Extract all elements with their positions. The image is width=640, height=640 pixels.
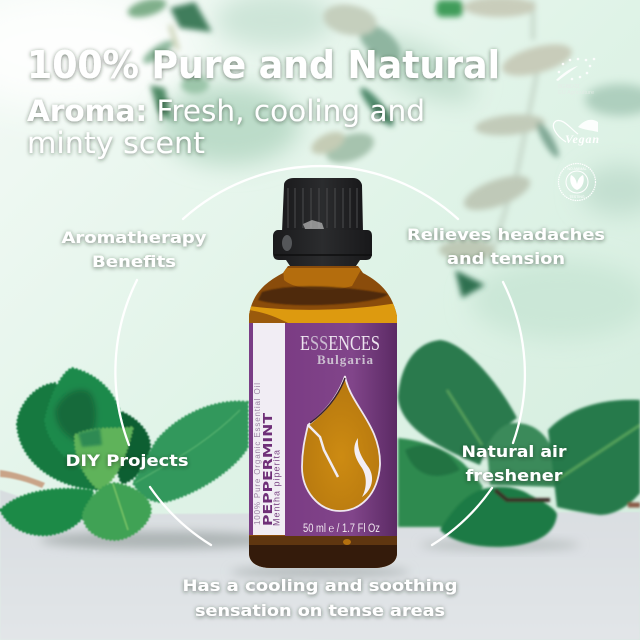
mint sprig right — [398, 340, 640, 547]
brand logo — [300, 331, 380, 367]
icon: EU organic leaf — [556, 58, 595, 96]
aroma description — [27, 94, 425, 160]
label: relieves headaches: Relieves headaches — [407, 225, 605, 244]
label: natural air freshener: freshener — [466, 466, 563, 485]
label: relieves headaches — [407, 225, 605, 268]
icon: EU organic leaf: EU Agriculture — [558, 90, 594, 96]
volume text: 50 ml ℮ / 1.7 Fl Oz — [303, 523, 380, 535]
label: aromatherapy benefits — [62, 228, 207, 271]
label: DIY projects: DIY Projects — [66, 451, 188, 470]
black cap — [282, 178, 363, 232]
side strip text: 100% Pure Organic Essential Oil — [253, 383, 262, 525]
label: cooling sensation — [182, 576, 458, 620]
peppermint bottle — [249, 178, 397, 568]
mint sprig left — [0, 368, 248, 540]
label: aromatherapy benefits: Benefits — [92, 252, 176, 271]
label: relieves headaches: and tension — [447, 249, 565, 268]
brand logo: Bulgaria — [317, 352, 374, 367]
blurred eucalyptus leaves — [126, 0, 575, 298]
aroma description: minty scent — [27, 126, 205, 160]
white circle arcs — [115, 166, 525, 545]
white side strip — [253, 323, 285, 535]
icon: EU organic leaf: BG-BIO-21 — [558, 84, 580, 90]
side strip text: PEPPERMINT — [261, 412, 275, 526]
side strip text: Mentha piperita — [272, 450, 282, 526]
icon: no animal testing: NO ANIMAL — [567, 167, 587, 171]
label: natural air freshener — [462, 442, 567, 485]
label: cooling sensation: sensation on tense areas — [195, 601, 445, 620]
title: 100% Pure and Natural — [27, 43, 500, 87]
certification icons — [553, 58, 599, 201]
amber drop emblem — [302, 376, 380, 511]
icon: vegan: Vegan — [565, 132, 599, 146]
icon: no animal testing — [558, 164, 596, 200]
aroma description: Aroma: Fresh, cooling and — [27, 94, 425, 128]
purple label — [285, 323, 397, 536]
label: aromatherapy benefits: Aromatherapy — [62, 228, 207, 247]
icon: no animal testing: TESTING — [569, 195, 585, 199]
label: natural air freshener: Natural air — [462, 442, 567, 461]
bottle glass — [249, 266, 397, 568]
brand logo: ESSENCES — [300, 331, 380, 355]
side strip text — [253, 383, 282, 526]
table surface — [0, 490, 640, 640]
icon: vegan — [553, 120, 599, 146]
label: cooling sensation: Has a cooling and soothing — [182, 576, 458, 595]
